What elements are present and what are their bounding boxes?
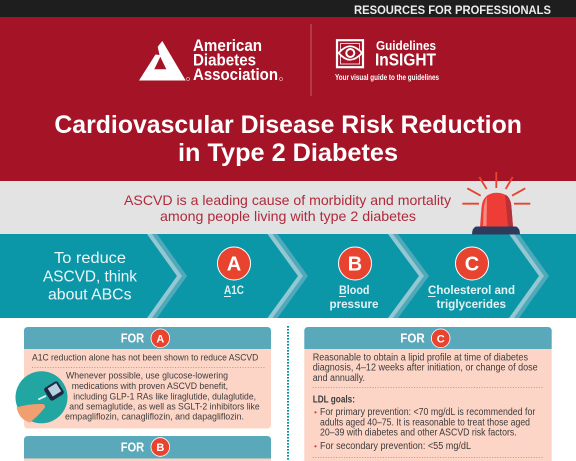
heading: for B: FOR [121, 441, 144, 455]
item A: A1C: A1C [224, 285, 244, 297]
American Diabetes Association logo: Association [193, 66, 278, 84]
item B: blood pressure: Blood [339, 285, 370, 297]
item B: blood pressure [330, 247, 378, 311]
top bar: resources for professionals [0, 0, 576, 17]
text: medications: including GLP-1 RAs like liraglutide, dulaglutide, [73, 391, 256, 402]
text: LDL goals: 20–39 with diabetes and other ASCVD risk factors. [320, 428, 517, 439]
dotted column divider [287, 326, 289, 461]
American Diabetes Association logo [139, 37, 283, 84]
item B: blood pressure: pressure [330, 299, 378, 311]
callout text: among people living with type 2 diabetes [160, 208, 416, 224]
header panel [0, 17, 576, 181]
intro text [43, 250, 138, 304]
text: LDL goals: LDL goals: [313, 394, 355, 405]
heading: for C [400, 329, 450, 348]
text: medications [65, 371, 260, 423]
heading: for B [121, 438, 170, 456]
top bar: resources for professionals: RESOURCES FOR PROFESSIONALS [354, 5, 551, 17]
text: medications: Whenever possible, use glucose-lowering [66, 371, 228, 382]
American Diabetes Association logo: Diabetes [193, 52, 256, 70]
text: LDL goals: For primary prevention: <70 mg/dL is recommended for [320, 407, 536, 418]
Guidelines InSIGHT logo [335, 39, 439, 82]
heading: for B: B [156, 442, 164, 454]
item A: A1C [218, 247, 250, 297]
heading: for A: FOR [121, 332, 144, 346]
text: lipid profile: and annually. [313, 373, 365, 384]
panel: for B [24, 436, 271, 461]
Guidelines InSIGHT logo: Your visual guide to the guidelines [335, 73, 439, 82]
heading: for A [121, 329, 170, 348]
intro text: about ABCs [48, 286, 132, 304]
heading: for C: FOR [400, 332, 425, 346]
intro text: To reduce [54, 250, 126, 267]
chevron arrows [147, 234, 549, 318]
grey callout band [0, 181, 576, 234]
Guidelines InSIGHT logo: InSIGHT [375, 50, 436, 70]
icon: glucose meter [16, 371, 68, 423]
text: A1C note: A1C reduction alone has not been shown to reduce ASCVD [32, 353, 258, 364]
callout text: ASCVD is a leading cause of morbidity and mortality [124, 192, 451, 208]
text: LDL goals: For secondary prevention: <55 mg/dL [320, 441, 472, 452]
panel: for C [304, 327, 552, 461]
American Diabetes Association logo: American [193, 37, 262, 55]
text: medications: empagliflozin, canagliflozin, and dapagliflozin. [65, 412, 244, 423]
text: LDL goals: adults aged 40–75. It is reasonable to treat those aged [320, 417, 530, 428]
icon: eye in frame [337, 40, 363, 67]
item C: cholesterol and triglycerides [428, 247, 515, 311]
callout text [124, 192, 451, 224]
item C: cholesterol and triglycerides: Cholesterol and [428, 285, 515, 297]
text: lipid profile: diagnosis, 4–12 weeks after initiation, or change of dose [313, 363, 538, 374]
ABC band [0, 234, 576, 318]
intro text: ASCVD, think [43, 268, 138, 286]
item C: cholesterol and triglycerides: C [465, 254, 479, 276]
title [54, 111, 522, 167]
item C: cholesterol and triglycerides: triglycerides [436, 299, 506, 311]
text: lipid profile [313, 352, 538, 384]
title: Cardiovascular Disease Risk Reduction [54, 111, 522, 139]
Guidelines InSIGHT logo: Guidelines [376, 39, 436, 53]
text: LDL goals [313, 394, 536, 452]
text: medications: medications with proven ASCVD benefit, [72, 381, 228, 392]
heading: for A: A [156, 333, 164, 345]
heading: for C: C [437, 333, 445, 345]
panel: for A [16, 327, 271, 428]
icon: red siren [462, 172, 530, 234]
title: in Type 2 Diabetes [178, 139, 398, 167]
item A: A1C: A [227, 254, 241, 276]
item B: blood pressure: B [348, 254, 362, 276]
text: lipid profile: Reasonable to obtain a lipid profile at time of diabetes [313, 352, 528, 363]
icon: ADA triangle mark [139, 41, 186, 80]
text: medications: and semaglutide, as well as SGLT-2 inhibitors like [69, 402, 260, 413]
